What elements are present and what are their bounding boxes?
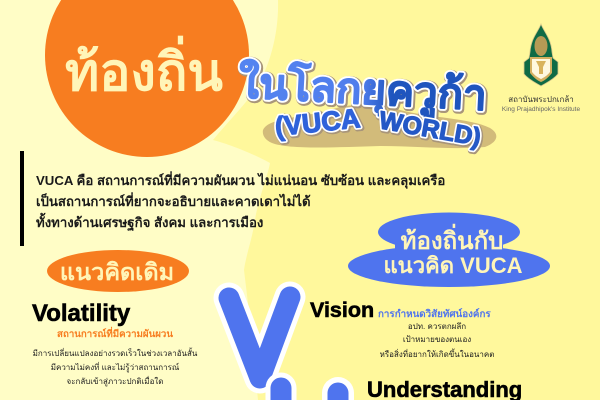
big letter V <box>229 297 290 378</box>
subtitle: WORLD): WORLD) <box>378 107 484 153</box>
subtitle: in the VUCA world: ในโลกยุควูก้า <box>237 58 488 122</box>
intro text: ทั้งทางด้านเศรษฐกิจ สังคม และการเมือง <box>36 212 263 232</box>
Vision description <box>380 322 494 359</box>
Vision subheading: การกำหนดวิสัยทัศน์องค์กร <box>378 308 491 320</box>
Vision description: หรือสิ่งที่อยากให้เกิดขึ้นในอนาคต <box>380 348 494 359</box>
subtitle: (VUCA: (VUCA <box>273 103 362 142</box>
Vision description: อปท. ควรตกผลึก <box>408 322 466 331</box>
institute name: สถาบันพระปกเกล้า <box>508 95 574 104</box>
title: local: ท้องถิ่น <box>65 36 223 102</box>
Volatility description: จะกลับเข้าสู่ภาวะปกติเมื่อใด <box>67 375 163 387</box>
institute name: King Prajadhipok's Institute <box>502 106 580 113</box>
logo: King Prajadhipok's Institute emblem <box>524 24 558 86</box>
Vision heading: Vision <box>310 298 374 322</box>
intro text: VUCA คือ สถานการณ์ที่มีความผันผวน ไม่แน่นอน ซับซ้อน และคลุมเครือ <box>36 170 445 189</box>
big letter: Understanding initial <box>322 393 354 400</box>
subtitle backdrop blob <box>263 104 496 148</box>
subtitle: in the VUCA world: ในโลกยุควูก้า <box>237 58 488 122</box>
background: light yellow panel <box>0 0 278 400</box>
subtitle: WORLD): WORLD) <box>377 106 483 152</box>
Volatility description: มีความไม่คงที่ และไม่รู้ว่าสถานการณ์ <box>51 361 180 373</box>
orange pill: original thinking: แนวคิดเดิม <box>60 259 174 285</box>
subtitle: in the VUCA world: ในโลกยุควูก้า <box>238 59 489 123</box>
big letter U: left stem <box>266 388 296 400</box>
blue cloud: local with VUCA <box>348 212 550 287</box>
intro text: เป็นสถานการณ์ที่ยากจะอธิบายและคาดเดาไม่ได้ <box>36 191 311 209</box>
subtitle: (VUCA: (VUCA <box>275 104 363 143</box>
orange pill: original thinking <box>47 250 189 292</box>
institute name <box>502 95 580 113</box>
Volatility heading: Volatility <box>32 300 131 327</box>
Vision description: เป้าหมายของตนเอง <box>403 335 471 344</box>
blue cloud: local with VUCA: ท้องถิ่นกับ <box>401 223 503 255</box>
vertical black rule <box>20 151 24 246</box>
subtitle: (VUCA: (VUCA <box>273 103 362 142</box>
Volatility description: มีการเปลี่ยนแปลงอย่างรวดเร็วในช่วงเวลาอันสั้น <box>33 347 198 358</box>
Volatility subheading: สถานการณ์ที่มีความผันผวน <box>57 326 173 340</box>
orange circle <box>45 0 249 157</box>
Volatility description <box>33 347 198 387</box>
blue cloud: local with VUCA: แนวคิด VUCA <box>383 253 523 278</box>
subtitle: WORLD): WORLD) <box>377 106 483 152</box>
intro text <box>36 170 445 232</box>
